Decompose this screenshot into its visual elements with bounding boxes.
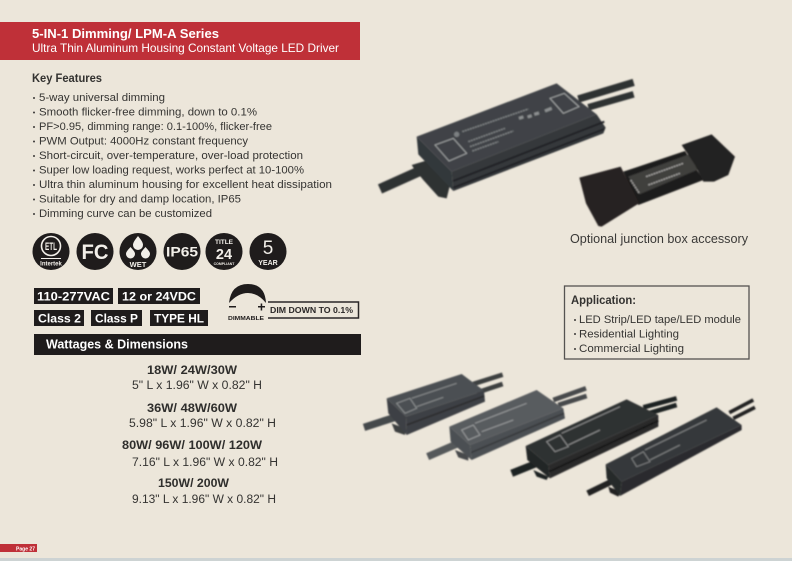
wattages and dimensions list: 80W/ 96W/ 100W/ 120W (122, 440, 262, 452)
certification icons (32, 233, 286, 270)
wattages and dimensions list: 18W/ 24W/30W (147, 365, 237, 377)
wattages and dimensions list: 7.16" L x 1.96" W x 0.82" H (132, 457, 278, 469)
application list: Commercial Lighting (579, 343, 684, 355)
icon: ETL Intertek: Intertek (40, 262, 62, 268)
callout: dim down to 0.1% (268, 302, 358, 318)
wattages and dimensions list: 5" L x 1.96" W x 0.82" H (132, 380, 262, 392)
icon: Title 24: 24 (216, 247, 232, 263)
key features list: Super low loading request, works perfect at 10-100% (39, 164, 304, 176)
product photo: four driver sizes (364, 374, 755, 497)
icon: dimmable (228, 284, 266, 322)
application list: LED Strip/LED tape/LED module (579, 314, 741, 326)
page number tag (0, 544, 37, 552)
spec badges (34, 288, 208, 326)
driver 3 (512, 398, 677, 480)
icon: Title 24 (206, 233, 242, 270)
wattages and dimensions list: 150W/ 200W (158, 478, 229, 490)
badge: type HL: TYPE HL (154, 312, 204, 326)
driver 2 (428, 388, 587, 461)
icon: WET drops: WET (130, 260, 147, 269)
icon: ETL Intertek: ETL (45, 241, 57, 253)
application heading: Application: (571, 295, 636, 307)
application list (574, 314, 741, 355)
badge: class 2: Class 2 (38, 312, 81, 326)
panel: application (564, 286, 749, 359)
key features list: Dimming curve can be customized (39, 208, 212, 220)
icon: dimmable: DIMMABLE (228, 316, 264, 322)
key features list: Suitable for dry and damp location, IP65 (39, 194, 241, 206)
wattages and dimensions list (122, 365, 278, 506)
wattages and dimensions list: 5.98" L x 1.96" W x 0.82" H (129, 418, 276, 430)
wattages and dimensions list: 36W/ 48W/60W (147, 403, 237, 415)
icon: Title 24: COMPLIANT (214, 262, 235, 266)
product photo: junction box accessory (579, 134, 735, 227)
caption: optional junction box: Optional junction box accessory (570, 232, 749, 246)
key features list: Smooth flicker-free dimming, down to 0.1% (39, 106, 257, 118)
key features list: PF>0.95, dimming range: 0.1-100%, flicker-free (39, 121, 272, 133)
icon: 5 year warranty: 5 (263, 238, 273, 259)
key features list: Short-circuit, over-temperature, over-load protection (39, 150, 303, 162)
wattages heading bar (34, 334, 361, 355)
key features list (33, 92, 332, 220)
callout: dim down to 0.1%: DIM DOWN TO 0.1% (270, 305, 353, 315)
driver 1 (364, 374, 503, 435)
badge: output voltage: 12 or 24VDC (122, 290, 196, 304)
driver 4 (588, 400, 755, 497)
key features list: Ultra thin aluminum housing for excellent heat dissipation (39, 179, 332, 191)
product photo: main LED driver (380, 82, 634, 198)
key features list: PWM Output: 4000Hz constant frequency (39, 136, 249, 148)
page number tag: Page 27 (16, 546, 35, 552)
icon: FC: FC (82, 241, 108, 264)
icon: IP65: IP65 (166, 244, 198, 260)
badge: class P: Class P (95, 312, 138, 326)
icon: 5 year warranty (250, 233, 286, 270)
icon: FC (76, 233, 114, 270)
icon: IP65 (164, 233, 200, 270)
wattages heading bar: Wattages & Dimensions (46, 338, 188, 352)
key features heading: Key Features (32, 73, 102, 85)
icon: 5 year warranty: YEAR (258, 260, 278, 267)
icon: Title 24: TITLE (215, 239, 234, 246)
key features list: 5-way universal dimming (39, 92, 165, 104)
icon: WET drops (120, 233, 156, 270)
badge: input voltage: 110-277VAC (37, 290, 110, 304)
application list: Residential Lighting (579, 328, 679, 340)
wattages and dimensions list: 9.13" L x 1.96" W x 0.82" H (132, 494, 276, 506)
subtitle: Ultra Thin Aluminum Housing Constant Voltage LED Driver (32, 41, 339, 55)
title banner (0, 22, 360, 60)
icon: ETL Intertek (32, 233, 70, 270)
title: 5-IN-1 Dimming/ LPM-A Series (32, 27, 219, 41)
